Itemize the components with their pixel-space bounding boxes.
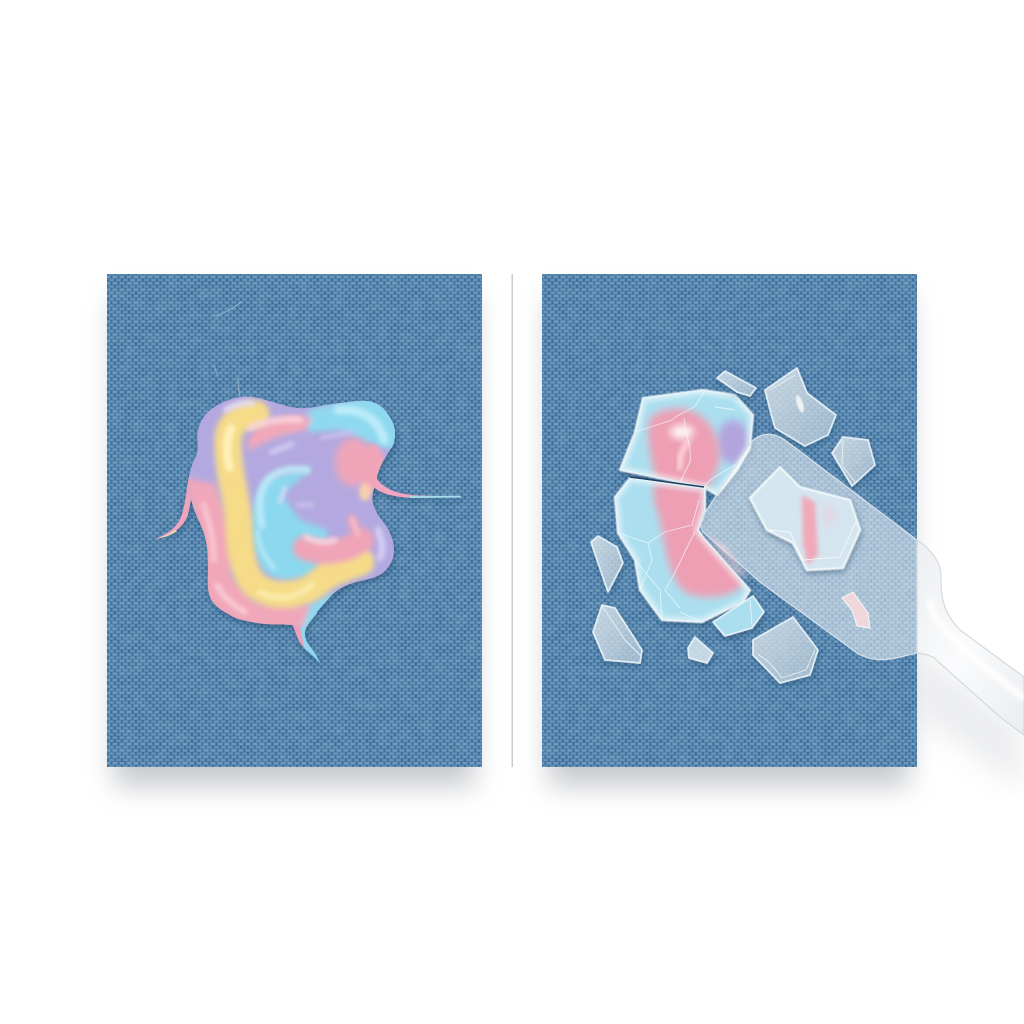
shard lower left [593, 605, 642, 663]
pink smear under blade edge [705, 535, 750, 580]
panel shadows [114, 296, 909, 786]
colour swirls [185, 395, 400, 632]
highlights [204, 403, 384, 612]
loose threads [214, 302, 241, 396]
shard top sliver [717, 371, 756, 396]
panel: right fabric swatch with shattered slime [542, 274, 917, 767]
spatula neck and handle [917, 540, 1024, 735]
fabric noise left [107, 274, 482, 767]
handle shadow on white [920, 658, 1024, 778]
illustration: two fabric panels [100, 274, 1024, 800]
shard far left [591, 536, 623, 592]
pink fragment on spatula [842, 592, 870, 628]
shard top large [765, 368, 836, 446]
fabric noise right [542, 274, 917, 767]
divider line [512, 274, 513, 767]
panel: left fabric swatch with slime [107, 274, 482, 767]
small shards on fabric [591, 368, 875, 683]
shard lower centre [753, 617, 818, 683]
shard on spatula [750, 467, 860, 570]
fabric swatch right [542, 274, 917, 767]
fabric swatch left [107, 274, 482, 767]
spatula blade over fabric [701, 434, 917, 660]
transparent spatula [701, 434, 1024, 735]
shard right [832, 437, 875, 486]
large shard lower [615, 478, 750, 622]
slime blob [155, 390, 461, 664]
slime tendrils [155, 472, 461, 664]
large shard upper [620, 390, 753, 495]
shard blue sliver [713, 596, 764, 636]
slime body [180, 390, 400, 635]
crack line [630, 477, 704, 487]
pink patch right [335, 438, 371, 486]
shard tiny [688, 637, 713, 663]
